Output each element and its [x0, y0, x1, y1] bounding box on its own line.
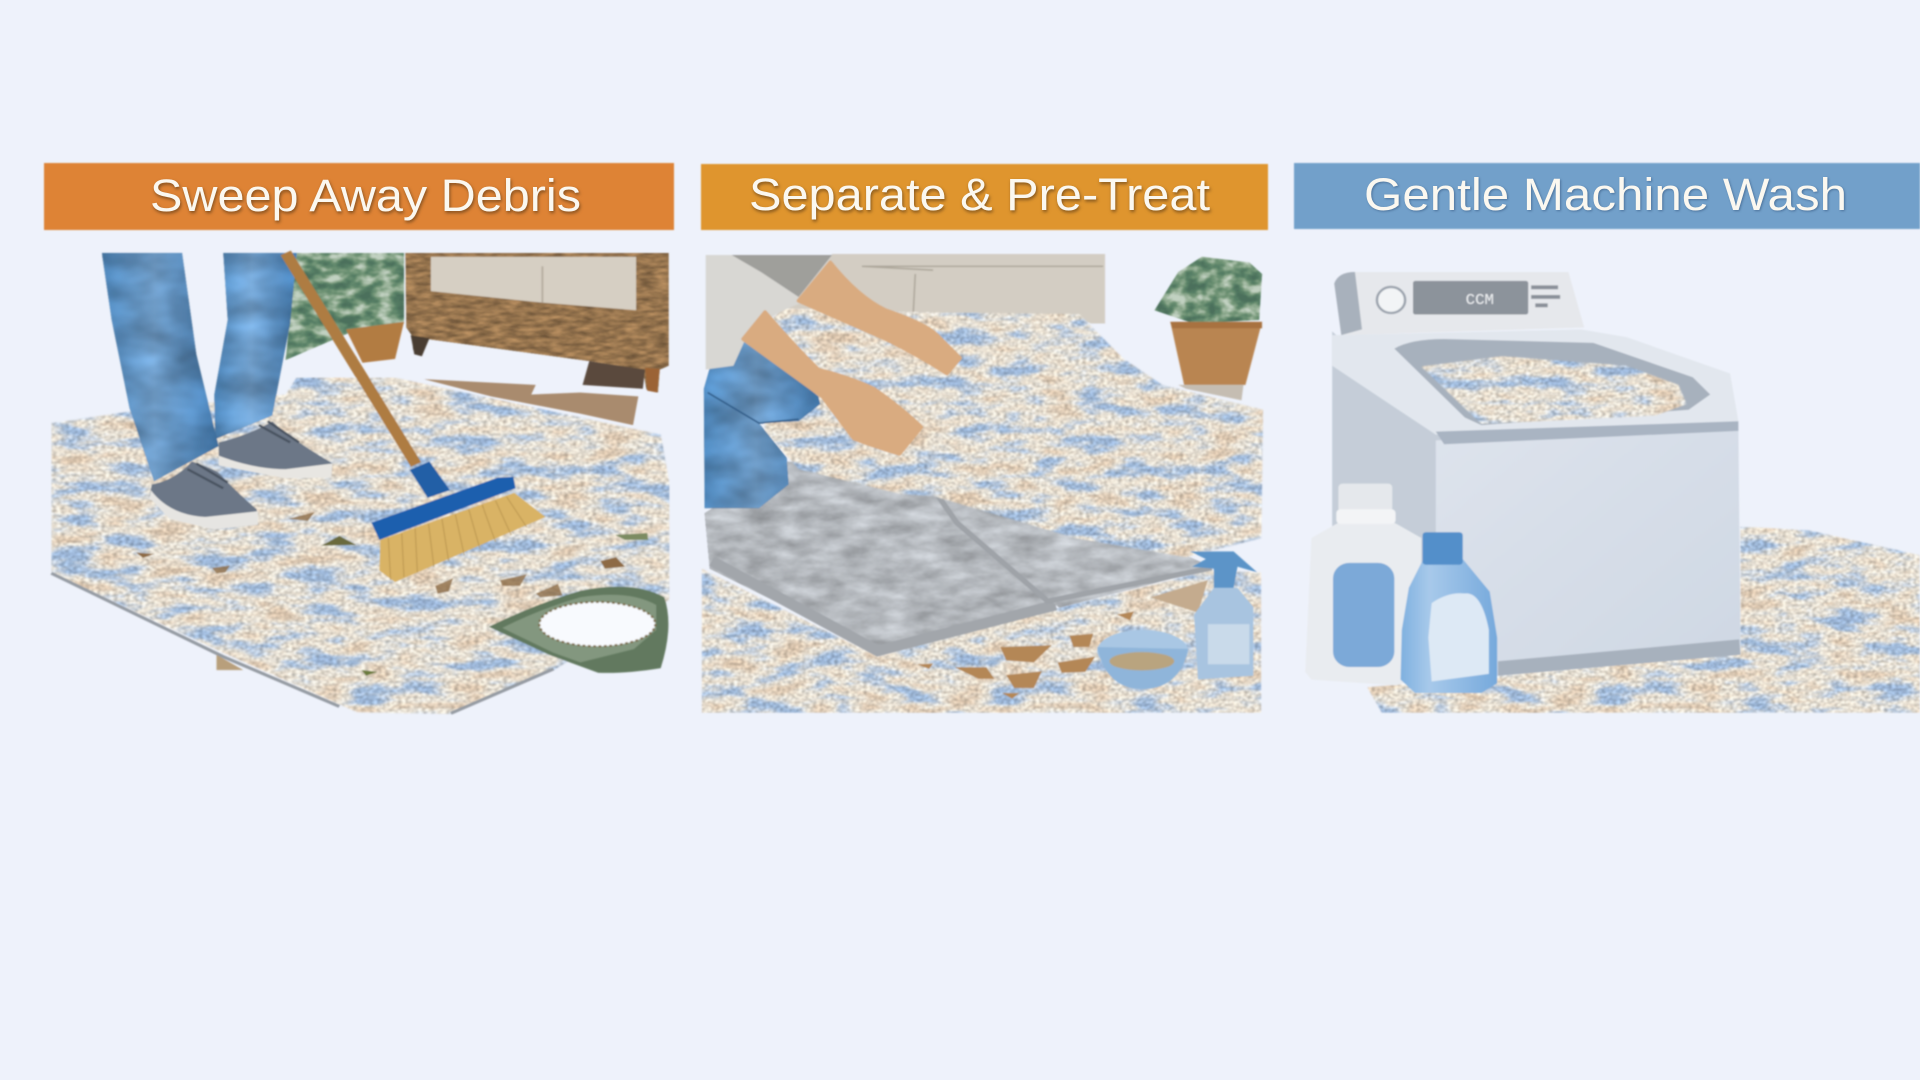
illustration: lifting rug	[702, 254, 1263, 713]
wicker sofa	[405, 253, 669, 393]
broom	[286, 253, 546, 582]
front shoe	[150, 461, 258, 530]
sofa	[783, 254, 1105, 324]
debris pile	[917, 611, 1134, 699]
dustpan	[489, 587, 668, 673]
wood floor	[424, 379, 638, 425]
heading banner: Gentle Machine Wash	[1294, 163, 1920, 229]
plant in background	[286, 253, 404, 363]
white detergent bottle	[1305, 484, 1421, 685]
spray bottle	[1190, 551, 1257, 680]
bowl	[1097, 630, 1188, 689]
jeans	[102, 253, 297, 481]
control panel	[1334, 272, 1584, 335]
shirt	[706, 255, 832, 370]
illustration: sweeping rug	[51, 253, 670, 714]
panel: gentle machine wash	[1294, 163, 1920, 713]
potted plant	[1154, 257, 1262, 400]
side panel	[1332, 331, 1444, 676]
rug	[51, 377, 670, 714]
heading banner: Separate & Pre-Treat	[701, 164, 1268, 230]
rug underside	[705, 446, 1214, 653]
panel: sweep away debris	[44, 163, 674, 714]
arms	[743, 262, 960, 454]
illustration: washing machine	[1305, 272, 1920, 713]
heading banner: Sweep Away Debris: Sweep Away Debris	[150, 170, 581, 221]
lifted rug top	[759, 308, 1263, 557]
control panel: CCM	[1466, 291, 1494, 309]
kneeling legs	[704, 335, 820, 508]
lower rug	[702, 569, 1261, 713]
tub opening	[1394, 339, 1710, 425]
top deck	[1332, 329, 1738, 437]
debris	[136, 512, 648, 676]
rear shoe	[219, 421, 333, 478]
washing machine	[1332, 272, 1740, 676]
rug in tub	[1421, 356, 1687, 424]
heading banner: Separate & Pre-Treat: Separate & Pre-Treat	[749, 169, 1211, 220]
heading banner: Gentle Machine Wash: Gentle Machine Wash	[1364, 169, 1847, 220]
blue detergent bottle	[1401, 532, 1497, 693]
rug on floor	[1367, 527, 1920, 713]
front panel	[1436, 429, 1740, 676]
panel: separate and pre-treat	[701, 164, 1268, 713]
floor tile	[1151, 580, 1208, 613]
heading banner: Sweep Away Debris	[44, 163, 674, 230]
